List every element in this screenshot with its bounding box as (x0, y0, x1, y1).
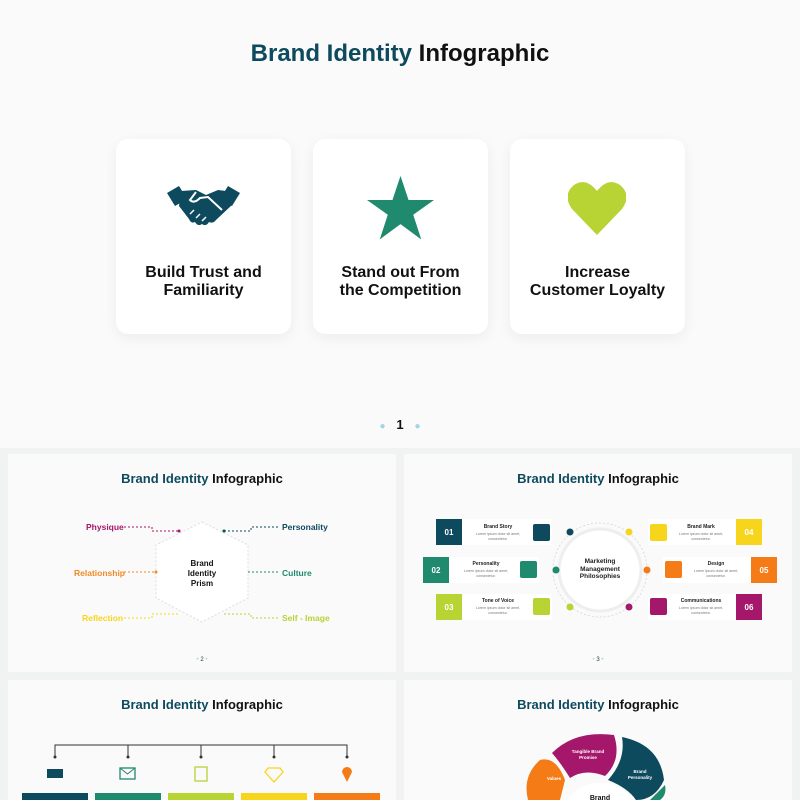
heading: Brand Identity Infographic (517, 471, 679, 486)
heading: Brand Identity Infographic (517, 697, 679, 712)
prism diagram: Culture (282, 568, 312, 578)
panel: brand wheel (404, 680, 792, 800)
philosophies diagram: Personality (473, 561, 500, 567)
philosophies diagram: 06 (745, 603, 754, 612)
panel: marketing philosophies (404, 454, 792, 672)
wheel diagram (526, 734, 666, 800)
wheel diagram: Values (547, 776, 562, 781)
card: stand out: the Competition (340, 282, 461, 299)
philosophies diagram: Lorem ipsum dolor sit amet, (679, 532, 723, 536)
panel: top hero (0, 0, 800, 448)
prism diagram: Personality (282, 522, 328, 532)
philosophies diagram: Lorem ipsum dolor sit amet, (694, 569, 738, 573)
philosophies diagram: consectetur. (691, 611, 711, 615)
philosophies diagram: Brand Mark (687, 524, 715, 530)
card: loyalty (510, 139, 685, 334)
philosophies diagram: Lorem ipsum dolor sit amet, (679, 606, 723, 610)
philosophies diagram: consectetur. (476, 574, 496, 578)
philosophies diagram: 04 (745, 528, 754, 537)
philosophies diagram: Lorem ipsum dolor sit amet, (476, 532, 520, 536)
philosophies diagram: 05 (760, 566, 769, 575)
wheel diagram: Brand (633, 769, 647, 774)
philosophies diagram: consectetur. (706, 574, 726, 578)
prism diagram: Self - Image (282, 613, 330, 623)
prism diagram: Reflection (82, 613, 123, 623)
philosophies diagram: Lorem ipsum dolor sit amet, (476, 606, 520, 610)
philosophies diagram: Marketing (585, 558, 615, 565)
card: stand out: Stand out From (341, 264, 460, 281)
wheel diagram: Promise (579, 755, 597, 760)
icon: heart (568, 182, 626, 235)
philosophies diagram (423, 519, 777, 620)
panel: prism (8, 454, 396, 672)
card: stand out (313, 139, 488, 334)
wheel diagram: Tangible Brand (572, 749, 604, 754)
card: loyalty: Increase (565, 264, 630, 281)
prism diagram: Relationship (74, 568, 125, 578)
philosophies diagram: consectetur. (488, 611, 508, 615)
philosophies diagram: Lorem ipsum dolor sit amet, (464, 569, 508, 573)
philosophies diagram: Philosophies (580, 573, 621, 580)
heading: Brand Identity Infographic (121, 697, 283, 712)
pagination 3: • 3 • (593, 657, 603, 663)
panel: tree bars (8, 680, 396, 800)
title: Brand Identity Infographic (251, 40, 549, 67)
philosophies diagram: Management (580, 566, 621, 573)
icon: star (367, 176, 434, 240)
prism diagram: Brand (190, 559, 214, 568)
tree diagram (22, 744, 380, 800)
prism diagram: Identity (188, 569, 217, 578)
card: trust: Build Trust and (145, 264, 262, 281)
pagination 1: ● 1 ● (380, 417, 420, 432)
philosophies diagram: Communications (681, 598, 721, 604)
prism diagram: Physique (86, 522, 124, 532)
philosophies diagram: 01 (445, 528, 454, 537)
philosophies diagram: consectetur. (691, 537, 711, 541)
prism diagram: Prism (191, 579, 213, 588)
philosophies diagram: Design (708, 561, 724, 567)
icon: handshake (167, 186, 240, 226)
card: trust (116, 139, 291, 334)
card: trust: Familiarity (163, 282, 244, 299)
philosophies diagram: Brand Story (484, 524, 513, 530)
prism diagram (74, 522, 330, 623)
philosophies diagram: 02 (432, 566, 441, 575)
philosophies diagram: consectetur. (488, 537, 508, 541)
philosophies diagram: 03 (445, 603, 454, 612)
wheel diagram: Personality (628, 775, 653, 780)
heading: Brand Identity Infographic (121, 471, 283, 486)
card: loyalty: Customer Loyalty (530, 282, 665, 299)
philosophies diagram: Tone of Voice (482, 598, 514, 604)
pagination 2: • 2 • (197, 657, 207, 663)
